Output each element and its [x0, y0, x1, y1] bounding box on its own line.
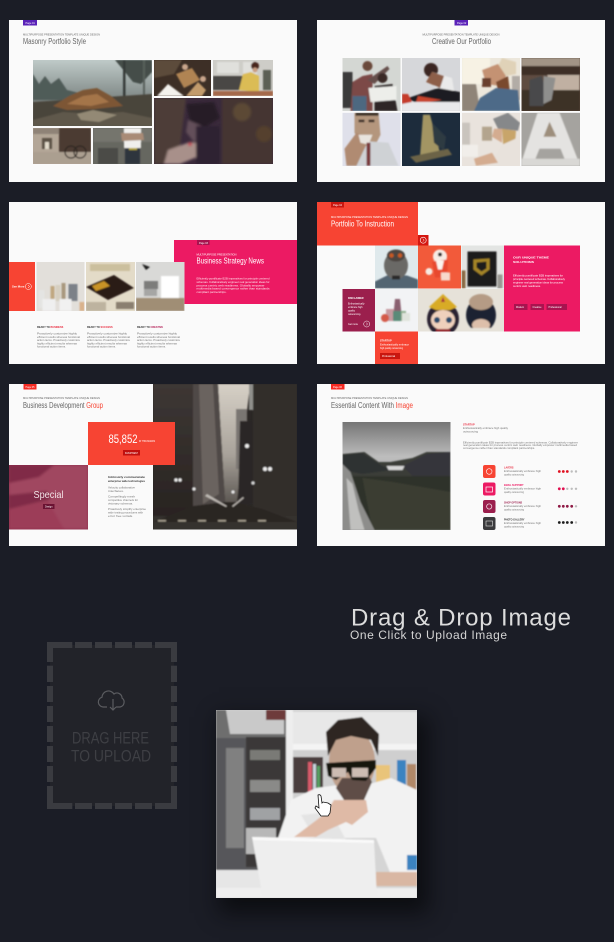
column: ready to success: efficient results whereas functional — [87, 336, 131, 339]
feature row: layers: quality outsourcing — [504, 473, 525, 476]
slide subtitle: MULTIPURPOSE PRESENTATION TEMPLATE UNIQUE DESIGN — [23, 33, 100, 36]
feature row: layers — [483, 465, 577, 478]
star rating — [558, 487, 577, 490]
text block: list of benefits: wide testing procedures with — [108, 512, 144, 514]
slide title: Masonry Portfolio Style — [23, 37, 86, 46]
photo: man with folded arms — [93, 128, 152, 164]
icon: circled arrow — [25, 284, 31, 290]
feature row: shop options: SHOP OPTIONS — [504, 502, 523, 504]
column: ready to business — [37, 326, 81, 349]
star rating — [558, 505, 577, 508]
column: ready to creative — [137, 326, 181, 349]
column: ready to success: functional action items. — [87, 346, 116, 349]
panel paragraph: multimedia based convergence rather than standards — [196, 288, 271, 291]
button: creative: Creative — [532, 306, 542, 309]
text block: list of benefits: competitive channels for — [108, 499, 138, 502]
feature row: photo gallery: Enthusiastically embrace high — [504, 522, 542, 525]
page tag — [331, 384, 344, 390]
pink solutions panel: centric web readiness. — [513, 285, 541, 288]
page tag — [24, 384, 36, 390]
slide title: Essential Content With Image — [331, 401, 413, 410]
photo: chair and canvas room — [136, 262, 184, 311]
photo: city street at night — [153, 384, 297, 530]
photo: orange mascot illustration — [418, 246, 461, 288]
photo: black business card on papers — [86, 262, 135, 311]
red statistic block: IN THOUSANDS — [139, 440, 155, 443]
page tag — [454, 20, 468, 26]
subheading: one click to upload: One Click to Upload Image — [350, 628, 507, 642]
panel paragraph: Efficiently pontificate B2B imperatives for principle centered — [196, 278, 270, 280]
text block: startup intro: outsourcing — [463, 430, 479, 433]
page tag — [23, 20, 37, 26]
orange see more block: See More — [12, 284, 25, 288]
button: professional: Professional — [548, 306, 562, 309]
pink solutions panel: engineer real generation ideas for process — [513, 282, 564, 284]
page tag: Page 05 — [26, 386, 35, 389]
button: modern: Modern — [516, 306, 525, 309]
photo: man eating paper — [342, 112, 400, 166]
photo: black framed poster — [462, 246, 504, 288]
text block: list of benefits: Intrinsicly communicate — [108, 475, 146, 479]
maroon disclaimer card: Get more — [348, 323, 359, 326]
panel: creative portfolio slide — [317, 20, 605, 182]
photo: woman holding flower, purple tone — [154, 98, 273, 164]
photo: dog and cat at fence — [522, 58, 580, 111]
text block: list of benefits: enterprise wide technologies — [108, 479, 145, 483]
page tag: Page 04 — [333, 204, 343, 207]
text block: list of benefits: Velocity collaborative — [108, 486, 136, 490]
slide subtitle: MULTIPURPOSE PRESENTATION TEMPLATE UNIQUE DESIGN — [422, 33, 500, 36]
drop zone label — [71, 728, 151, 766]
dashed border — [47, 642, 177, 809]
orange title block: MULTIPURPOSE PRESENTATION TEMPLATE UNIQUE DESIGN — [331, 216, 408, 219]
icon: cloud download — [98, 691, 124, 710]
feature row: layers: Enthusiastically embrace high — [504, 470, 542, 473]
feature row: photo gallery: PHOTO GALLERY — [504, 518, 525, 522]
panel paragraph: compliant partnerships. — [196, 291, 227, 294]
orange title block — [317, 202, 418, 246]
maroon special photo block — [9, 465, 88, 530]
text block: list of benefits — [108, 475, 147, 518]
text block: list of benefits: error free vortals. — [108, 515, 133, 518]
column: ready to creative: action items. Proactively customize — [137, 339, 181, 342]
icon: hand cursor — [315, 795, 331, 816]
button: statistic: INVESTMENT — [125, 453, 139, 455]
pink solutions panel — [504, 246, 580, 332]
photo: logs in foggy forest — [33, 60, 152, 126]
page tag: Page 01 — [26, 22, 35, 25]
panel: business strategy slide — [9, 202, 297, 364]
page tag: Page 06 — [333, 386, 343, 389]
text block: description paragraph — [463, 442, 578, 450]
panel: business development slide — [9, 384, 297, 546]
maroon disclaimer card: embrace high — [348, 306, 363, 309]
text block: startup intro — [463, 424, 509, 433]
photo: large white letter A — [522, 112, 580, 166]
slide subtitle: MULTIPURPOSE PRESENTATION TEMPLATE UNIQUE DESIGN — [23, 397, 100, 400]
photo: couple reading a map — [342, 58, 400, 111]
panel: masonry portfolio slide — [9, 20, 297, 182]
column: ready to creative: highly efficient results whereas — [137, 342, 178, 345]
orange startup card: STARTUP — [380, 340, 392, 342]
photo: bicycle against wall — [33, 128, 91, 164]
star rating — [558, 470, 577, 473]
column: ready to success: READY TO SUCCESS — [87, 326, 113, 329]
text block: description paragraph: Efficiently pontificate B2B imperatives for principle centered schemas. Collaboratively engineer — [463, 442, 578, 444]
slide title: Business Development Group — [23, 401, 103, 410]
panel paragraph — [196, 278, 271, 294]
text block: description paragraph: convergence rather than standards compliant partnerships. — [463, 447, 535, 450]
column: ready to success: highly efficient results whereas — [87, 342, 128, 345]
button: professional: Professional — [382, 355, 396, 358]
photo: blonde woman with beanie — [462, 112, 520, 166]
feature row: shop options — [483, 500, 577, 513]
text block: startup intro: STARTUP — [463, 424, 475, 426]
column: ready to business: action items. Proactively customize — [37, 339, 81, 342]
column: ready to creative: Proactively customize highly — [137, 332, 178, 336]
maroon disclaimer card — [342, 289, 375, 332]
feature row: email support: Enthusiastically embrace high — [504, 488, 542, 490]
feature row: photo gallery — [483, 517, 577, 530]
text block: list of benefits: Proactively simplify enterprise — [108, 508, 147, 511]
column: ready to success: Proactively customize highly — [87, 332, 128, 336]
maroon disclaimer card: DISCLAIMER — [348, 297, 364, 300]
photo: doll superheroes — [418, 289, 504, 332]
text block: list of benefits: interfaces. — [108, 490, 124, 493]
photo: colourful bottles — [380, 298, 412, 324]
red statistic block — [88, 422, 175, 465]
page tag: Page 03 — [199, 242, 209, 245]
panel paragraph: schemas. Collaboratively engineer real generation ideas for — [196, 281, 270, 284]
orange see more block — [9, 262, 35, 311]
column: ready to business: READY TO BUSINESS — [37, 326, 64, 329]
heading: drag and drop image: Drag & Drop Image — [351, 604, 571, 632]
maroon special photo block: Special — [34, 489, 64, 501]
feature row: photo gallery: quality outsourcing — [504, 525, 525, 528]
upload drop zone — [47, 642, 177, 809]
panel paragraph: process centric web readiness. Globally empower — [196, 284, 265, 287]
maroon disclaimer card: Enthusiastically — [348, 302, 365, 306]
icon: circled arrow — [364, 321, 370, 327]
pink solutions panel: OUR UNIQUE THEME — [513, 256, 549, 260]
button: design: Design — [45, 506, 53, 509]
pink solutions panel: SOLUTIONS — [513, 260, 534, 264]
feature row: shop options: quality outsourcing — [504, 508, 525, 511]
column: ready to success: action items. Proactively customize — [87, 339, 131, 342]
feature row: email support — [483, 482, 577, 496]
column: ready to business: Proactively customize highly — [37, 332, 78, 336]
photo: man with glasses at laptop — [216, 710, 417, 898]
text block: description paragraph: real generation ideas for process centric web readiness. Globally empower multimedia based — [463, 444, 578, 447]
photo: books and mugs — [36, 262, 84, 311]
icon: shop — [483, 482, 496, 496]
orange startup card: high quality outsourcing — [380, 347, 404, 350]
orange startup card: Enthusiastically embrace — [380, 343, 410, 346]
photo: woman stretching — [402, 58, 460, 111]
drop zone label: TO UPLOAD — [71, 746, 151, 766]
drop zone label: DRAG HERE — [72, 728, 149, 748]
feature row: email support: EMAIL SUPPORT — [504, 484, 524, 487]
column: ready to business: functional action items. — [37, 346, 66, 349]
column: ready to success — [87, 326, 131, 349]
column: ready to creative: functional action items. — [137, 346, 166, 349]
photo: woman in yellow at desk — [213, 60, 273, 96]
text block: list of benefits: Compellingly mesh — [108, 496, 136, 498]
panel title: Business Strategy News — [196, 256, 264, 266]
photo shadow — [216, 710, 417, 898]
text block: list of benefits: visionary schemas. — [108, 502, 133, 506]
photo: lit brick tower at night — [402, 112, 460, 166]
pink solutions panel: principle centered schemas. Collaboratively — [513, 278, 566, 281]
icon: layers — [483, 465, 496, 478]
pink solutions panel: Efficiently pontificate B2B imperatives for — [513, 274, 563, 278]
maroon disclaimer card: outsourcing. — [348, 313, 361, 316]
star rating — [558, 521, 577, 524]
panel subtitle: MULTIPURPOSE PRESENTATION — [196, 254, 237, 256]
statistic number: 85,852 — [108, 434, 138, 446]
photo: mountain landscape — [342, 422, 450, 530]
maroon disclaimer card: quality — [348, 310, 356, 312]
photo: owl illustration — [375, 246, 418, 288]
column: ready to business: efficient results whereas functional — [37, 336, 81, 339]
feature row: shop options: Enthusiastically embrace high — [504, 505, 542, 508]
icon: camera — [483, 517, 496, 530]
icon: gear — [483, 500, 496, 513]
feature row: email support: quality outsourcing — [504, 491, 525, 494]
photo: woman drinking with hat — [462, 58, 520, 111]
column: ready to business: highly efficient results whereas — [37, 342, 78, 345]
orange title block: Portfolio To Instruction — [331, 220, 394, 228]
feature row: layers: LAYERS — [504, 466, 514, 470]
column: ready to creative: efficient results whereas functional — [137, 336, 181, 339]
text block: startup intro: Enthusiastically embrace high quality — [463, 427, 509, 430]
orange startup card — [375, 332, 418, 364]
panel: essential content slide — [317, 384, 605, 546]
slide subtitle: MULTIPURPOSE PRESENTATION TEMPLATE UNIQUE DESIGN — [331, 397, 408, 400]
page tag: Page 02 — [457, 22, 467, 25]
icon: red square arrow button — [418, 235, 428, 246]
panel: portfolio to instruction slide — [317, 202, 605, 364]
column: ready to creative: READY TO CREATIVE — [137, 326, 163, 329]
pink news panel — [174, 240, 297, 304]
photo: hands with craft paper — [154, 60, 211, 96]
slide title: Creative Our Portfolio — [432, 37, 491, 46]
